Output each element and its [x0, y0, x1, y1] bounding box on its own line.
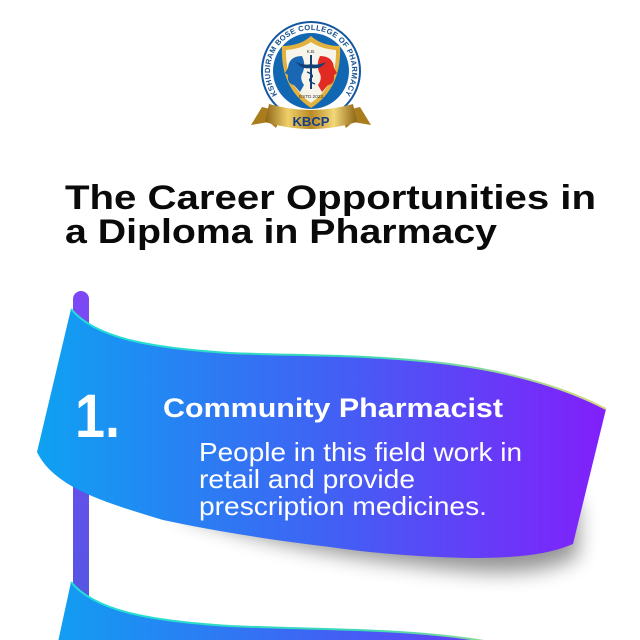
title: a Diploma in Pharmacy [65, 213, 497, 251]
title [65, 179, 596, 251]
ribbon shape [37, 309, 606, 558]
logo: Kshudiram Bose College of Pharmacy emblem [251, 21, 371, 129]
logo: Kshudiram Bose College of Pharmacy emblem: KSHUDIRAM BOSE COLLEGE OF PHARMACY [264, 24, 358, 97]
logo: Kshudiram Bose College of Pharmacy emblem: K.B. [307, 49, 315, 54]
body text: retail and provide [199, 464, 415, 494]
panel: ribbon 1 Community Pharmacist [37, 309, 606, 572]
title: The Career Opportunities in [65, 179, 596, 217]
panel: ribbon 2 (cropped) [58, 582, 490, 640]
logo: Kshudiram Bose College of Pharmacy emblem: ESTD.2023 [299, 94, 323, 99]
ribbon shadow [170, 490, 578, 572]
ribbon top edge highlight [71, 309, 606, 409]
timeline pole [73, 291, 89, 640]
body text: prescription medicines. [199, 491, 487, 521]
heading: Community Pharmacist [163, 393, 503, 423]
body text [199, 437, 522, 521]
number: 1. [75, 382, 120, 450]
body text: People in this field work in [199, 437, 522, 467]
logo: Kshudiram Bose College of Pharmacy emblem: KBCP [292, 114, 330, 129]
